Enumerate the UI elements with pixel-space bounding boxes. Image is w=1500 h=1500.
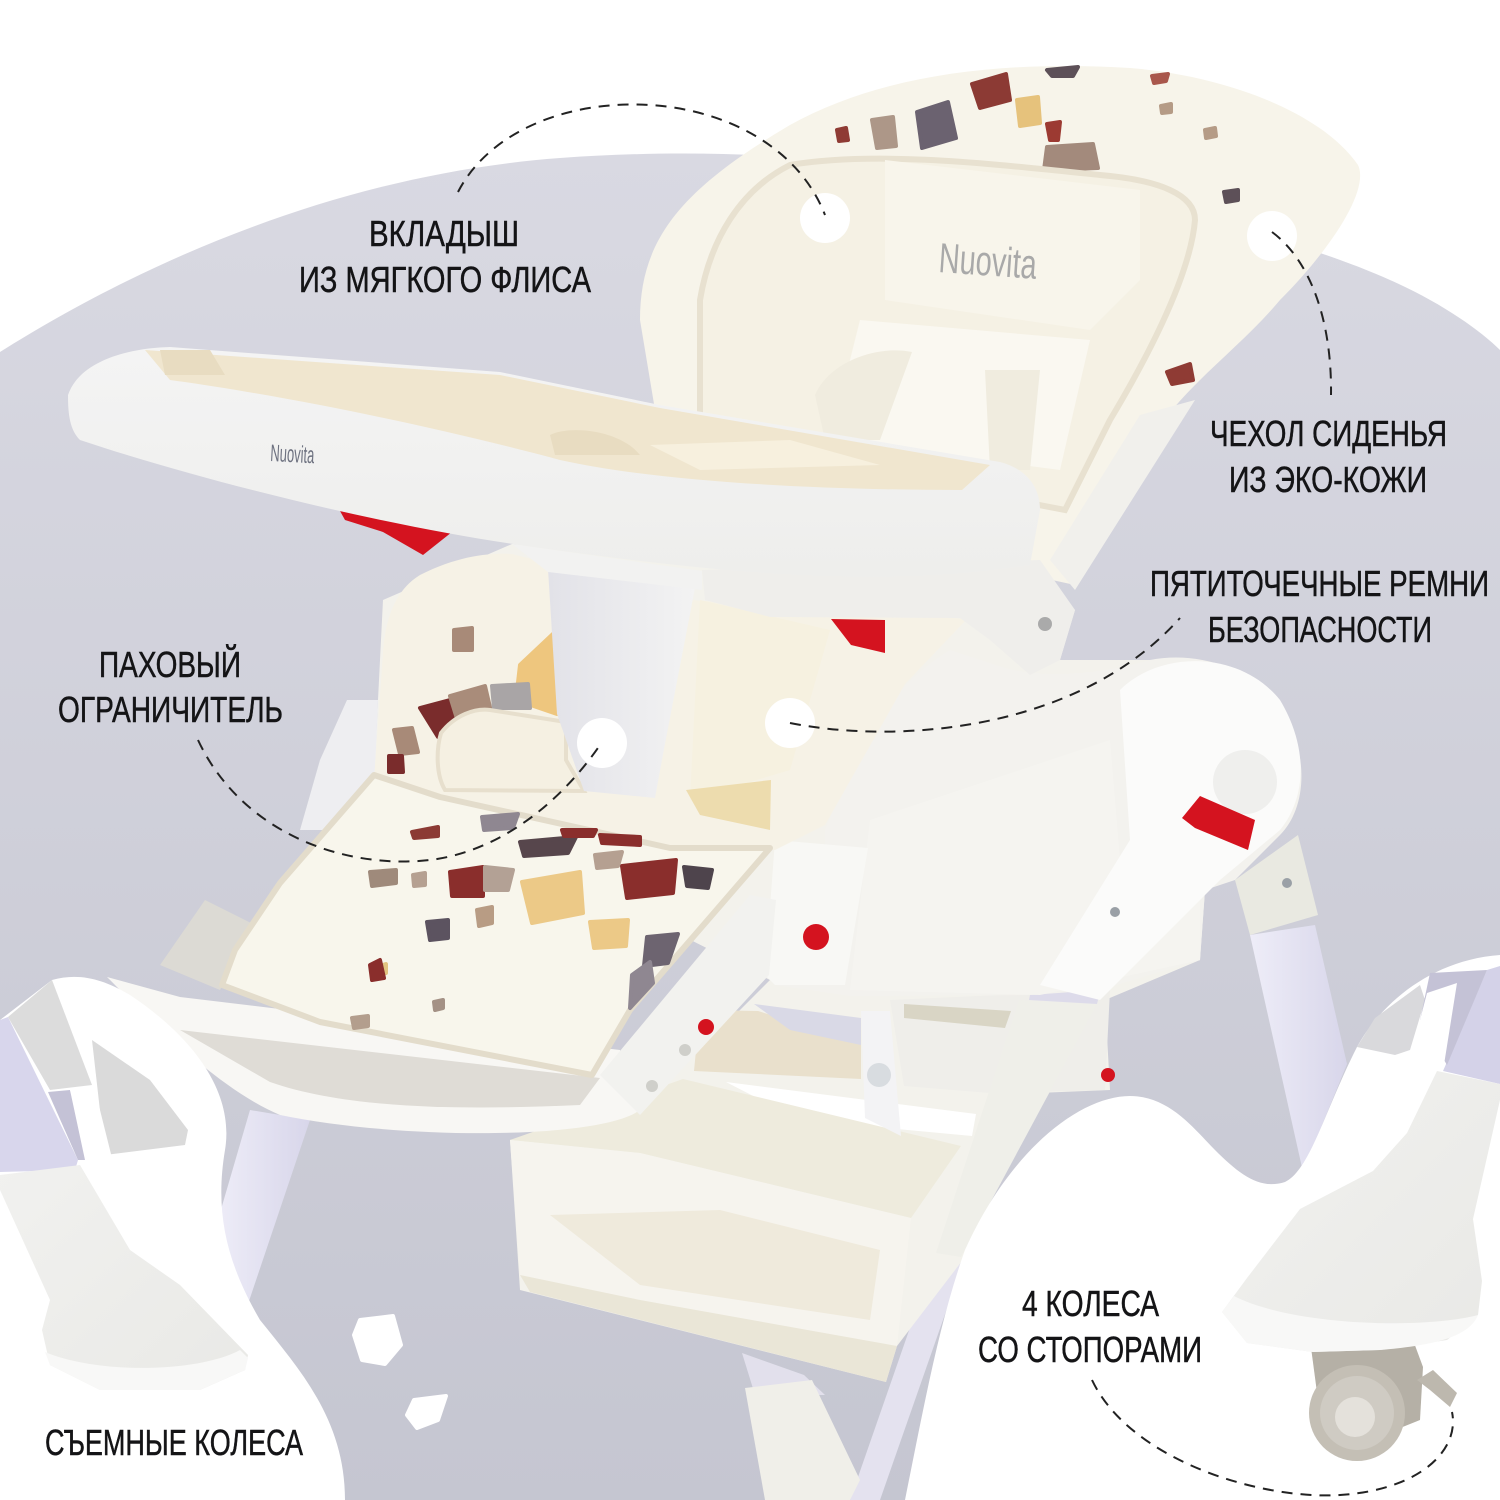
wheel — [1309, 1340, 1457, 1461]
inset: wheel left — [0, 980, 248, 1390]
pattern pebbles — [837, 67, 1238, 384]
basket — [510, 1010, 976, 1382]
label: eco leather cover: ИЗ ЭКО-КОЖИ — [1229, 459, 1427, 500]
label: crotch guard: ПАХОВЫЙ — [99, 643, 241, 685]
label: lockable wheels: 4 КОЛЕСА — [1022, 1283, 1159, 1324]
red tray latches — [340, 511, 452, 555]
tray stem — [548, 569, 695, 798]
decorative pebbles — [354, 1316, 446, 1428]
label: lockable wheels: СО СТОПОРАМИ — [978, 1329, 1202, 1370]
label: lockable wheels — [978, 1283, 1202, 1370]
label: harness — [1150, 563, 1489, 650]
label: removable wheels: СЪЕМНЫЕ КОЛЕСА — [45, 1422, 303, 1463]
tray arm — [702, 560, 1075, 675]
chair silhouette underlay — [374, 544, 1205, 1382]
marker: crotch guard — [198, 718, 627, 862]
label: crotch guard: ОГРАНИЧИТЕЛЬ — [58, 689, 283, 730]
label: fleece liner: ИЗ МЯГКОГО ФЛИСА — [299, 259, 591, 300]
marker: wheels — [1092, 1380, 1453, 1495]
logo on backrest: Nuovita — [937, 234, 1039, 288]
label: fleece liner — [299, 213, 591, 300]
tray — [68, 347, 1075, 798]
red button — [803, 924, 829, 950]
tray logo: Nuovita — [270, 440, 315, 469]
marker: fleece liner — [458, 104, 850, 243]
seat insert — [700, 159, 1195, 510]
lavender tube — [0, 1017, 78, 1172]
red lever — [1182, 796, 1255, 850]
seat pad pebbles — [352, 814, 712, 1028]
inset: wheel right — [1222, 966, 1500, 1461]
crotch guard — [438, 710, 584, 791]
base — [0, 1165, 248, 1390]
white blob: bottom right — [905, 955, 1500, 1500]
left seat frame plate — [300, 700, 378, 830]
lavender tube — [1443, 966, 1500, 1084]
strap pads — [815, 350, 912, 440]
cushion pebbles — [389, 628, 557, 772]
side frame — [765, 650, 1318, 1000]
footrest — [107, 895, 776, 1133]
base — [1222, 1071, 1500, 1352]
backrest — [640, 66, 1360, 590]
chair legs — [215, 925, 1347, 1500]
seat pad — [222, 775, 770, 1075]
seat — [374, 554, 967, 850]
label: fleece liner: ВКЛАДЫШ — [369, 213, 519, 254]
under-seat mechanism — [754, 964, 1115, 1257]
label: eco leather cover — [1210, 413, 1447, 500]
label: crotch guard — [58, 643, 283, 730]
white blob: bottom left — [0, 977, 345, 1500]
marker: harness — [765, 618, 1180, 748]
tray body — [68, 347, 1040, 577]
label: harness: БЕЗОПАСНОСТИ — [1208, 609, 1432, 650]
rear bracket — [1357, 985, 1425, 1055]
rear bracket — [92, 1040, 188, 1155]
marker: eco leather — [1247, 211, 1331, 395]
